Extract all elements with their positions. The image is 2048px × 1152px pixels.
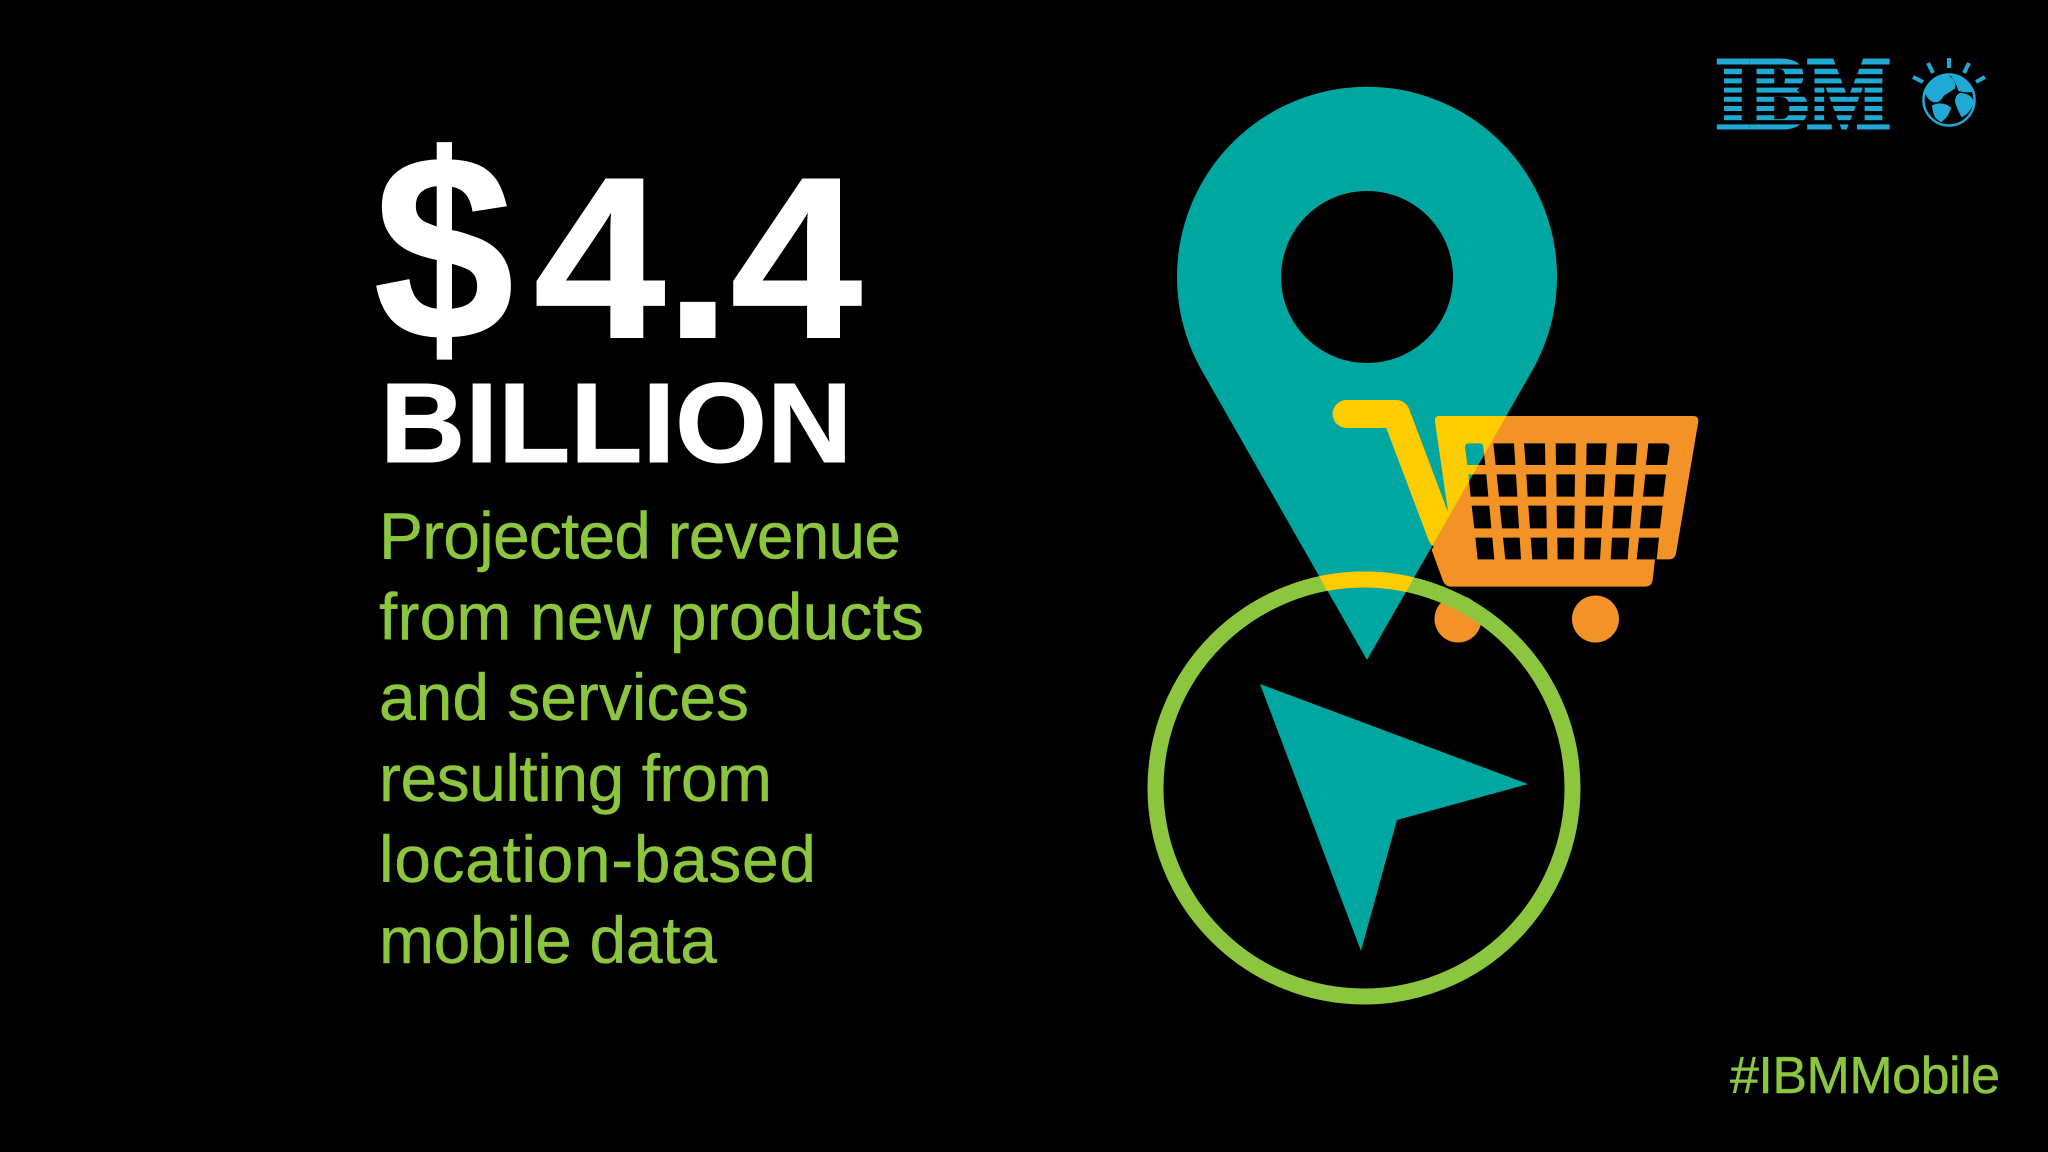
icon: location pin bbox=[1177, 87, 1557, 660]
description text: resulting from bbox=[379, 741, 772, 815]
description text: Projected revenue bbox=[379, 498, 901, 572]
description text: from new products bbox=[379, 580, 924, 654]
IBM wordmark: IBM bbox=[1716, 37, 1890, 149]
cart basket and handle bbox=[1347, 414, 1698, 587]
hashtag: #IBMMobile bbox=[1730, 1047, 2000, 1105]
icon: navigation arrow bbox=[1260, 684, 1528, 951]
headline figure: 4.4 bbox=[534, 131, 862, 386]
cart overlap with pin bbox=[1332, 400, 1506, 546]
icon: compass ring bbox=[1156, 580, 1572, 996]
billion label: BILLION bbox=[380, 360, 852, 486]
headline figure bbox=[374, 100, 862, 395]
description text: and services bbox=[379, 660, 749, 734]
IBM logo bbox=[1710, 37, 1985, 149]
headline figure: $ bbox=[374, 100, 513, 395]
description text bbox=[379, 498, 924, 977]
cart wheels bbox=[1434, 596, 1619, 642]
description text: mobile data bbox=[379, 903, 717, 977]
globe bbox=[1913, 58, 1985, 126]
icon: shopping cart bbox=[1347, 414, 1698, 642]
description text: location-based bbox=[379, 822, 816, 896]
